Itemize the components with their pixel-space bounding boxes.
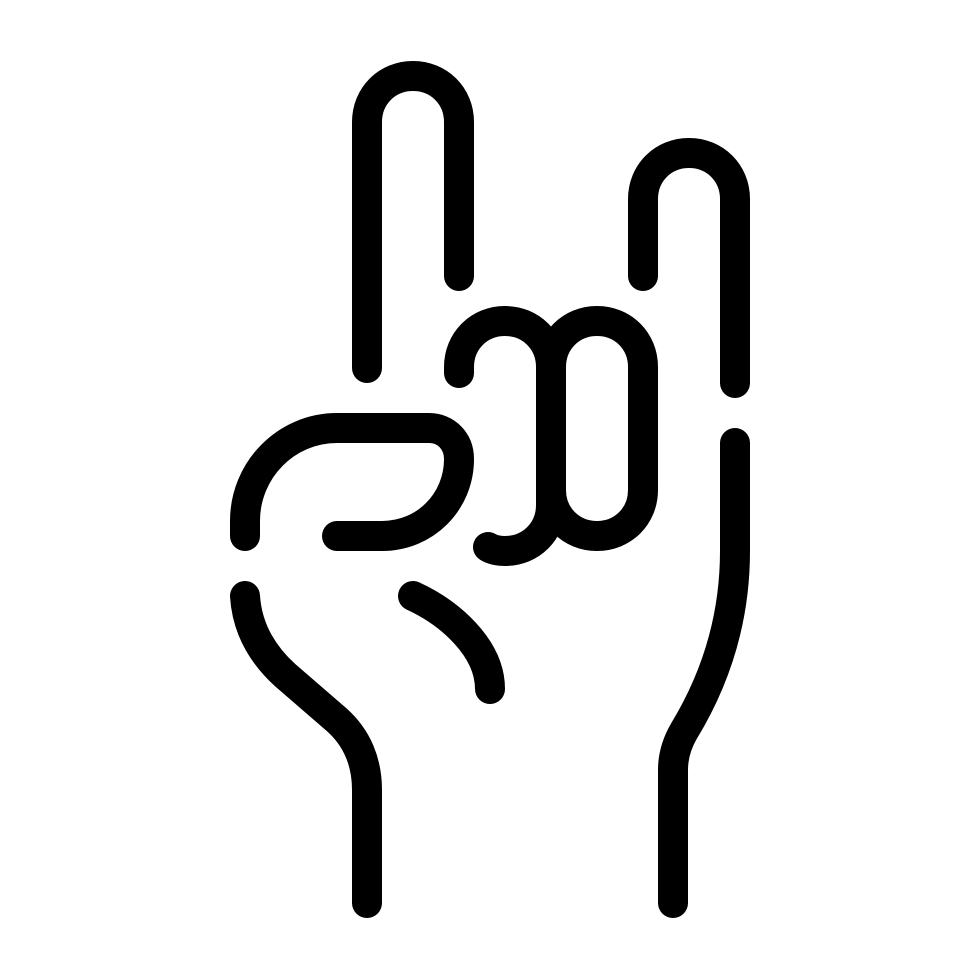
palm left edge — [245, 596, 367, 903]
curled ring finger — [551, 321, 643, 536]
palm crease — [413, 596, 490, 689]
curled middle finger — [459, 321, 551, 551]
index finger — [367, 76, 459, 368]
palm right edge — [673, 443, 735, 903]
thumb — [245, 428, 459, 536]
pinky finger — [643, 153, 735, 383]
